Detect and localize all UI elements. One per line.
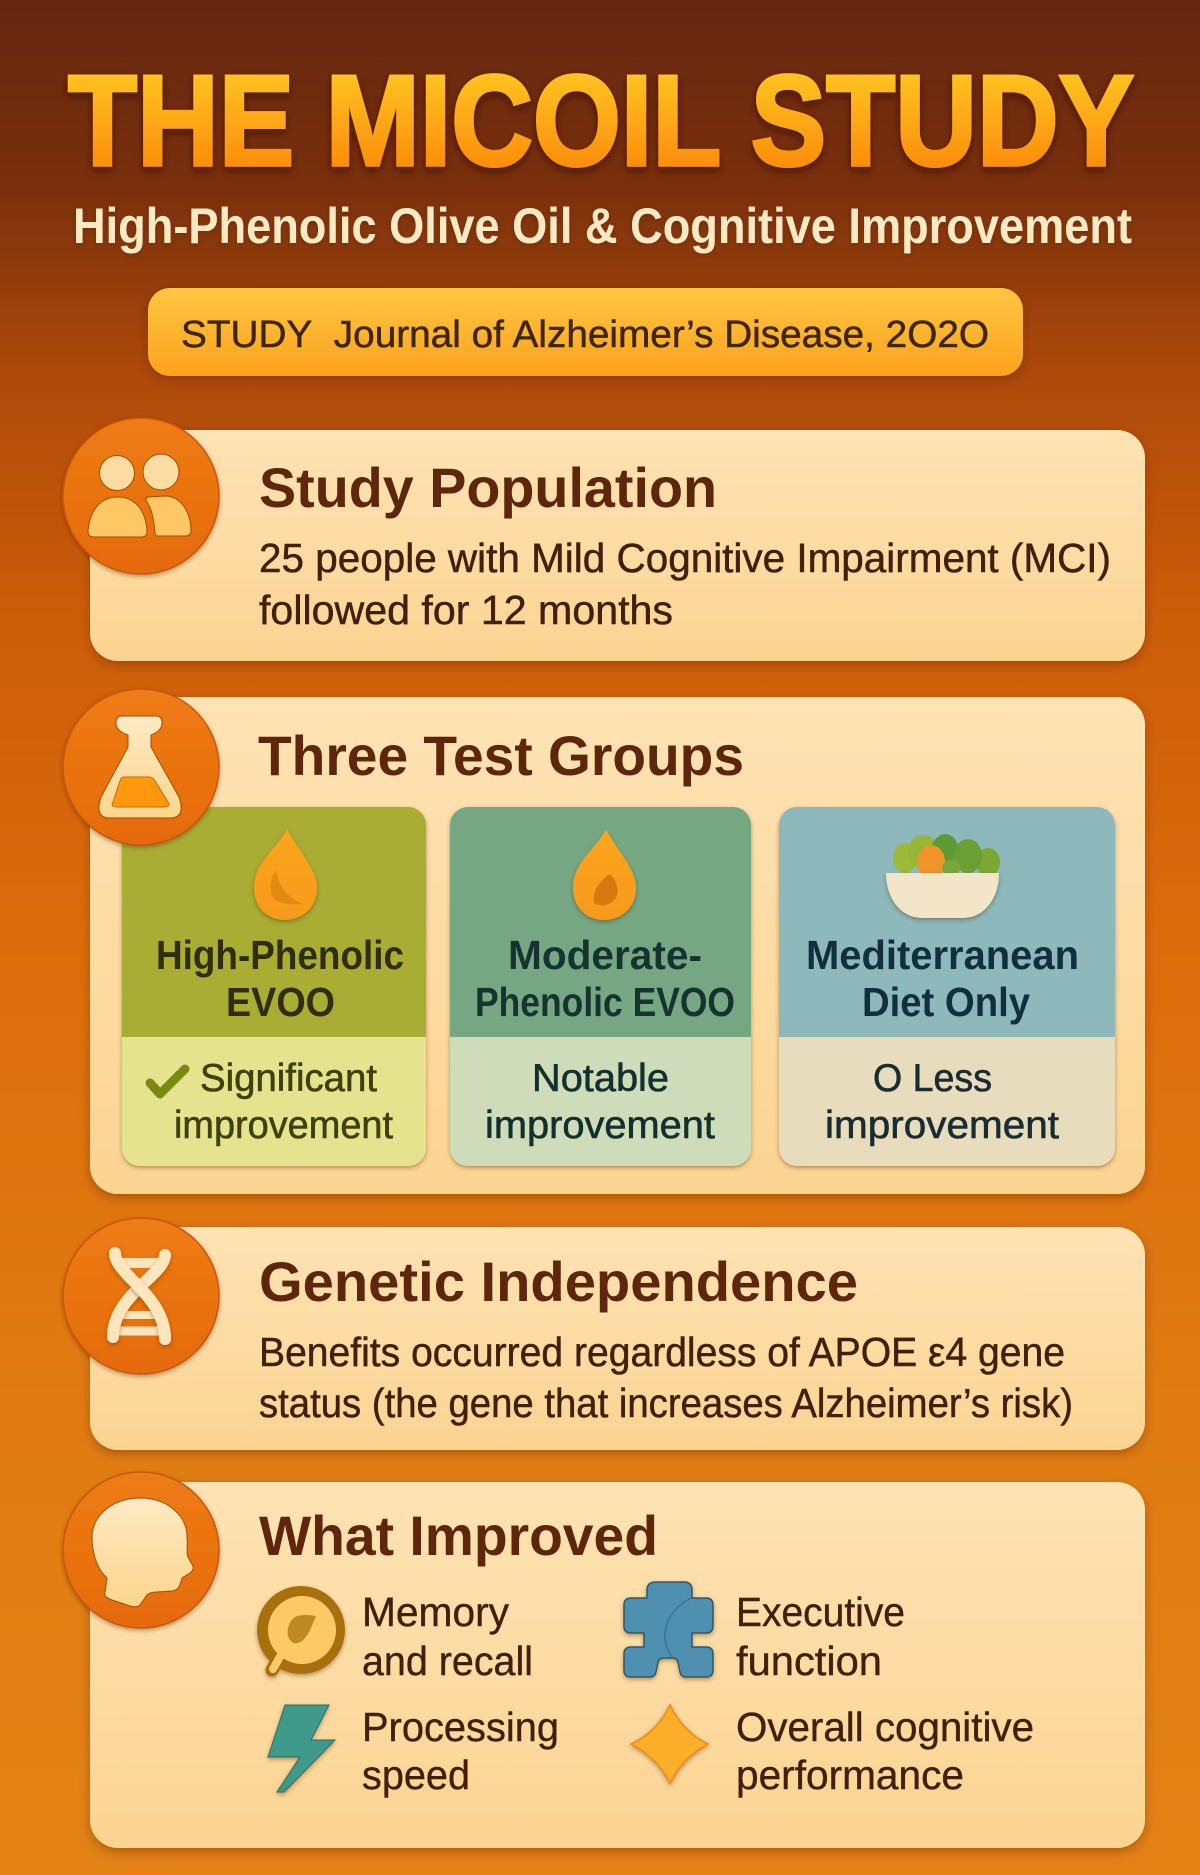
text block: followed for 12 months [259, 587, 673, 633]
icon: memory [257, 1586, 345, 1674]
icon: salad bowl [886, 834, 1000, 918]
panel: what improved [63, 1472, 1145, 1848]
result: Significant [200, 1057, 377, 1100]
icon: head [63, 1472, 219, 1628]
label: EVOO [226, 979, 335, 1025]
result: O Less [873, 1057, 992, 1100]
label: High-Phenolic [156, 932, 404, 978]
text block: 25 people with Mild Cognitive Impairment (MCI) [259, 535, 1111, 581]
panel: genetic independence [63, 1218, 1145, 1450]
icon: check mark [150, 1069, 185, 1094]
result [485, 1057, 715, 1147]
icon: sparkle [631, 1705, 708, 1783]
text: executive function: Executive [736, 1589, 905, 1635]
text: processing speed: speed [362, 1752, 470, 1798]
group card: moderate-phenolic [450, 807, 751, 1166]
text: memory and recall: and recall [362, 1638, 533, 1684]
icon: people [63, 418, 219, 574]
label: Moderate- [508, 932, 702, 978]
group card: high-phenolic [122, 807, 426, 1166]
group card: mediterranean diet [779, 807, 1115, 1166]
heading: Genetic Independence [259, 1250, 858, 1313]
heading: What Improved [259, 1504, 658, 1567]
text: overall cognitive performance [736, 1704, 1034, 1798]
text: overall cognitive performance: Overall cognitive [736, 1704, 1034, 1750]
text: overall cognitive performance: performance [736, 1752, 964, 1798]
label: Phenolic EVOO [475, 979, 735, 1025]
icon: oil drop [254, 829, 317, 920]
text: executive function [736, 1589, 905, 1684]
result [825, 1057, 1059, 1147]
result: improvement [485, 1104, 715, 1147]
text: processing speed: Processing [362, 1704, 559, 1750]
result: improvement [825, 1104, 1059, 1147]
text: executive function: function [736, 1638, 882, 1684]
result: Notable [532, 1057, 669, 1100]
text block [259, 1329, 1073, 1426]
text block [259, 535, 1111, 633]
label: Diet Only [862, 979, 1030, 1025]
result: improvement [174, 1104, 393, 1147]
icon: next section circle (cropped) [111, 1869, 171, 1875]
label [156, 932, 404, 1025]
panel: three test groups [63, 689, 1145, 1194]
text block: status (the gene that increases Alzheimer’s risk) [259, 1380, 1073, 1426]
panel: study population [63, 418, 1145, 661]
icon: dna [63, 1218, 219, 1374]
icon: lightning bolt [268, 1705, 335, 1792]
text: memory and recall: Memory [362, 1589, 509, 1635]
heading: Three Test Groups [258, 724, 744, 787]
icon: puzzle [624, 1582, 713, 1677]
label: Mediterranean [806, 932, 1079, 978]
text: processing speed [362, 1704, 559, 1798]
text block: Benefits occurred regardless of APOE ε4 gene [259, 1329, 1065, 1375]
study citation pill [148, 288, 1023, 376]
text: memory and recall [362, 1589, 533, 1684]
label [806, 932, 1079, 1025]
icon: oil drop [573, 829, 636, 920]
result [174, 1057, 393, 1147]
study citation pill: STUDY Journal of Alzheimer’s Disease, 2O2O [181, 314, 989, 356]
icon: flask [63, 689, 219, 845]
heading: Study Population [259, 456, 717, 519]
label [475, 932, 735, 1025]
